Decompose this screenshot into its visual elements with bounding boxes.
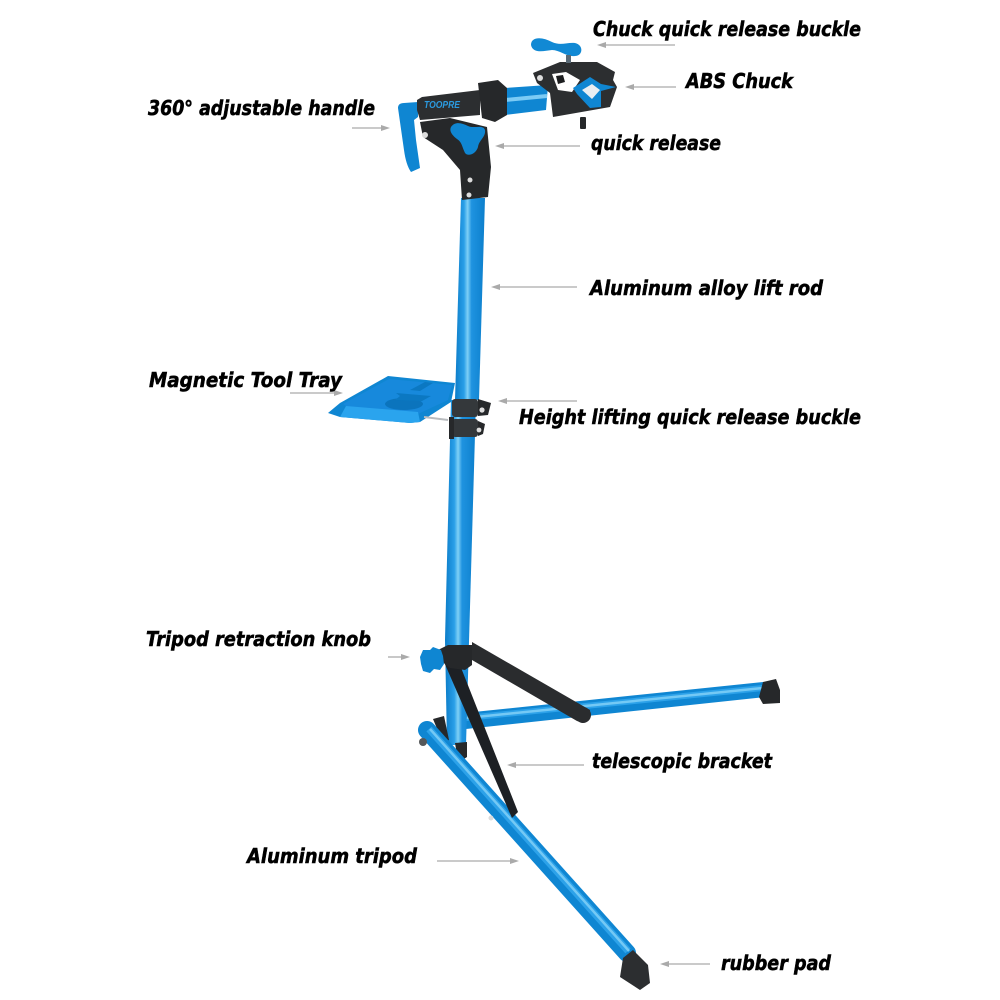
- arrow: aluminum alloy lift rod: [491, 284, 577, 290]
- label: aluminum alloy lift rod: Aluminum alloy lift rod: [588, 276, 824, 300]
- label: quick release: quick release: [591, 131, 721, 155]
- 360 adjustable handle: [398, 90, 480, 172]
- label: aluminum tripod: Aluminum tripod: [245, 844, 418, 868]
- arrow: 360 adjustable handle: [352, 125, 390, 131]
- label: magnetic tool tray: Magnetic Tool Tray: [149, 368, 343, 392]
- arrow: magnetic tool tray: [290, 390, 343, 396]
- upper lift rod: [455, 198, 485, 400]
- tripod collar and upper brace: [438, 642, 591, 723]
- chuck quick release buckle: [531, 38, 581, 63]
- telescopic bracket: [444, 660, 518, 818]
- label: chuck quick release buckle: Chuck quick release buckle: [593, 17, 861, 41]
- label: 360 adjustable handle: 360° adjustable handle: [148, 96, 375, 120]
- label: height lifting quick release buckle: Height lifting quick release buckle: [519, 405, 861, 429]
- arrow: chuck quick release buckle: [597, 42, 675, 48]
- arrow: telescopic bracket: [507, 762, 584, 768]
- tripod retraction knob: [420, 647, 444, 673]
- rod collar: [478, 80, 507, 122]
- label: telescopic bracket: telescopic bracket: [592, 749, 773, 773]
- head quick release knob: [450, 123, 485, 155]
- label: tripod retraction knob: Tripod retraction knob: [146, 627, 371, 651]
- arrow: rubber pad: [660, 961, 710, 967]
- head lower arm: [420, 118, 491, 200]
- bike repair stand illustration: [328, 38, 780, 990]
- arrow: quick release: [495, 143, 580, 149]
- lower post: [433, 400, 476, 761]
- horizontal blue rod: [505, 85, 548, 115]
- magnetic tool tray: [328, 376, 455, 423]
- ABS chuck: [533, 62, 617, 129]
- front tripod leg: [419, 729, 629, 953]
- label: rubber pad: rubber pad: [721, 951, 832, 975]
- label: ABS chuck: ABS Chuck: [684, 69, 795, 93]
- rear horizontal leg: [464, 679, 780, 729]
- arrow: aluminum tripod: [437, 858, 519, 864]
- 360 adjustable handle: TOOPRE: [424, 100, 460, 111]
- height lifting clamps: [449, 399, 491, 439]
- arrow: ABS chuck: [625, 84, 676, 90]
- arrow: tripod retraction knob: [388, 654, 410, 660]
- arrow: height lifting buckle: [498, 398, 577, 404]
- rubber pad: [620, 950, 650, 990]
